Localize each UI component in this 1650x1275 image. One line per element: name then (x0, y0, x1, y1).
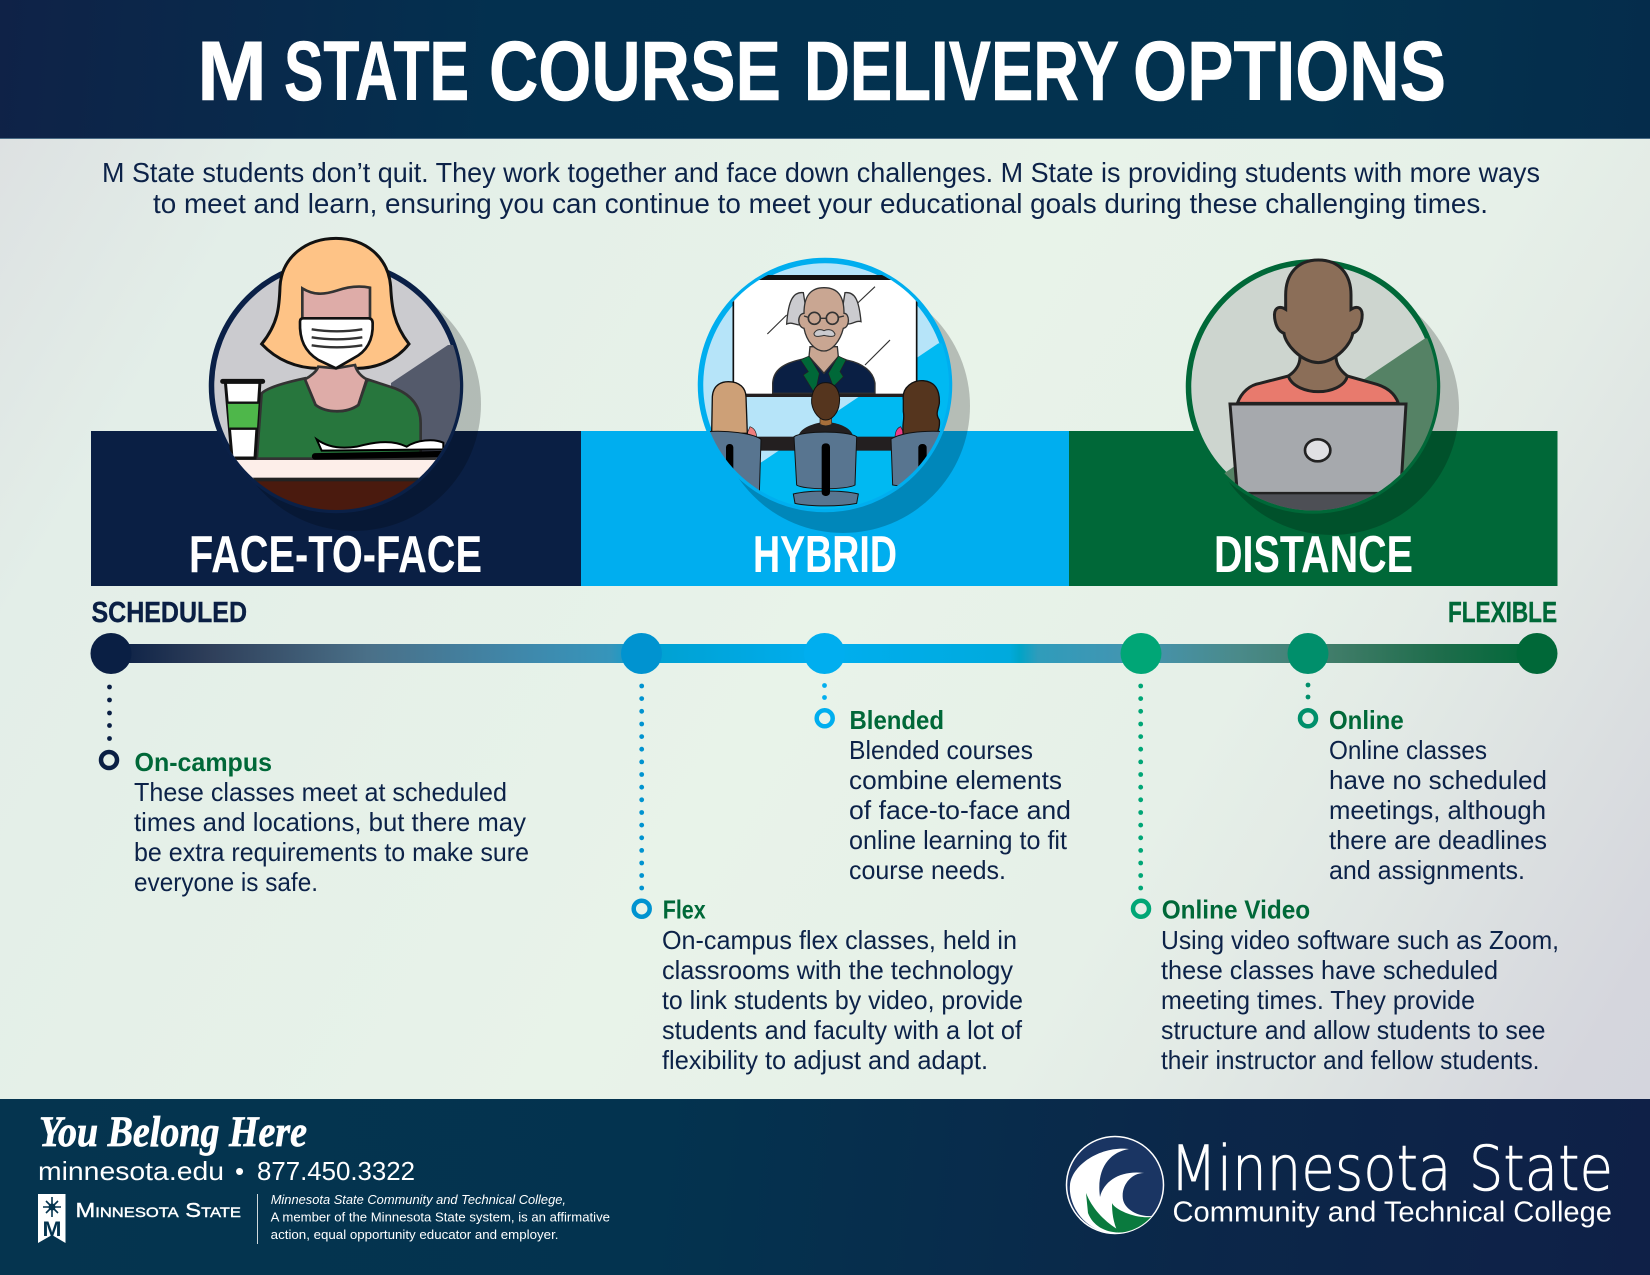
contact line: 877.450.3322 (257, 1156, 415, 1186)
item: online video: these classes have scheduled (1161, 955, 1498, 985)
affirmative action statement: Minnesota State Community and Technical College, (271, 1192, 566, 1207)
intro text: to meet and learn, ensuring you can continue to meet your educational goals during these challenging times. (153, 188, 1488, 219)
item: flex: classrooms with the technology (662, 955, 1013, 985)
wordmark: Minnesota State: Minnesota State (76, 1200, 241, 1222)
intro text (102, 157, 1540, 219)
item: blended: of face-to-face and (849, 795, 1071, 825)
item: blended: course needs. (849, 855, 1006, 885)
panel: distance band (1069, 431, 1558, 586)
title: COURSE (489, 24, 781, 118)
affirmative action statement (271, 1192, 610, 1242)
label: flexible: FLEXIBLE (1448, 597, 1557, 629)
item: online video (1133, 684, 1559, 1075)
item: online: meetings, although (1329, 795, 1546, 825)
item: online video: their instructor and fellow students. (1161, 1045, 1540, 1075)
panel: hybrid band (581, 431, 1069, 586)
affirmative action statement: A member of the Minnesota State system, is an affirmative (271, 1210, 610, 1225)
item: flex: to link students by video, provide (662, 985, 1023, 1015)
icon: masked student in classroom (212, 238, 481, 531)
item: blended: online learning to fit (849, 825, 1068, 855)
item: online: Online classes (1329, 735, 1487, 765)
item: online (1300, 683, 1547, 885)
item: on-campus (101, 685, 529, 897)
item: flex: Flex (663, 894, 706, 924)
item: blended: Blended courses (849, 735, 1033, 765)
icon: Minnesota State banner mark: M (42, 1218, 62, 1241)
icon: Minnesota State banner mark (38, 1194, 66, 1243)
item: blended: combine elements (849, 765, 1062, 795)
label: hybrid: HYBRID (753, 526, 897, 584)
label: scheduled: SCHEDULED (92, 597, 247, 629)
timeline: scheduled to flexible (90, 633, 1558, 674)
item: online video: structure and allow students to see (1161, 1015, 1546, 1045)
item: on-campus: be extra requirements to make sure (134, 837, 529, 867)
item: flex (634, 684, 1023, 1075)
item: flex: students and faculty with a lot of (662, 1015, 1023, 1045)
item: online: and assignments. (1329, 855, 1525, 885)
item: on-campus: everyone is safe. (134, 867, 318, 897)
college name: Community and Technical College (1172, 1197, 1612, 1229)
footer (0, 1099, 1650, 1275)
item: blended (817, 683, 1071, 885)
panel: face-to-face band (91, 431, 581, 586)
item: blended: Blended (850, 705, 944, 735)
item: online: there are deadlines (1329, 825, 1547, 855)
item: on-campus: times and locations, but there may (134, 807, 526, 837)
page background (0, 139, 1650, 1099)
title: DELIVERY (804, 24, 1118, 118)
label: distance: DISTANCE (1214, 526, 1413, 584)
label: face-to-face: FACE-TO-FACE (189, 526, 482, 584)
intro text: M State students don’t quit. They work together and face down challenges. M State is providing students with more ways (102, 157, 1540, 188)
item: online: have no scheduled (1329, 765, 1547, 795)
item: flex: flexibility to adjust and adapt. (662, 1045, 988, 1075)
icon: hybrid classroom with instructor on screen (693, 260, 970, 540)
tagline: You Belong Here (39, 1109, 307, 1156)
item: online video: meeting times. They provide (1161, 985, 1475, 1015)
affirmative action statement: action, equal opportunity educator and employer. (271, 1227, 558, 1242)
item: on-campus: On-campus (134, 747, 272, 777)
item: flex: On-campus flex classes, held in (662, 925, 1017, 955)
item: online video: Online Video (1162, 894, 1310, 924)
contact line: minnesota.edu (38, 1156, 224, 1186)
item: online: Online (1329, 705, 1404, 735)
header banner (0, 0, 1650, 139)
item: on-campus: These classes meet at scheduled (134, 777, 507, 807)
title: M (197, 24, 267, 118)
title: STATE (284, 24, 469, 118)
icon: college wave logo (1066, 1136, 1164, 1234)
contact line: • (235, 1156, 244, 1186)
icon: distance student with laptop (1188, 260, 1459, 540)
item: online video: Using video software such as Zoom, (1161, 925, 1559, 955)
title: OPTIONS (1133, 24, 1446, 118)
